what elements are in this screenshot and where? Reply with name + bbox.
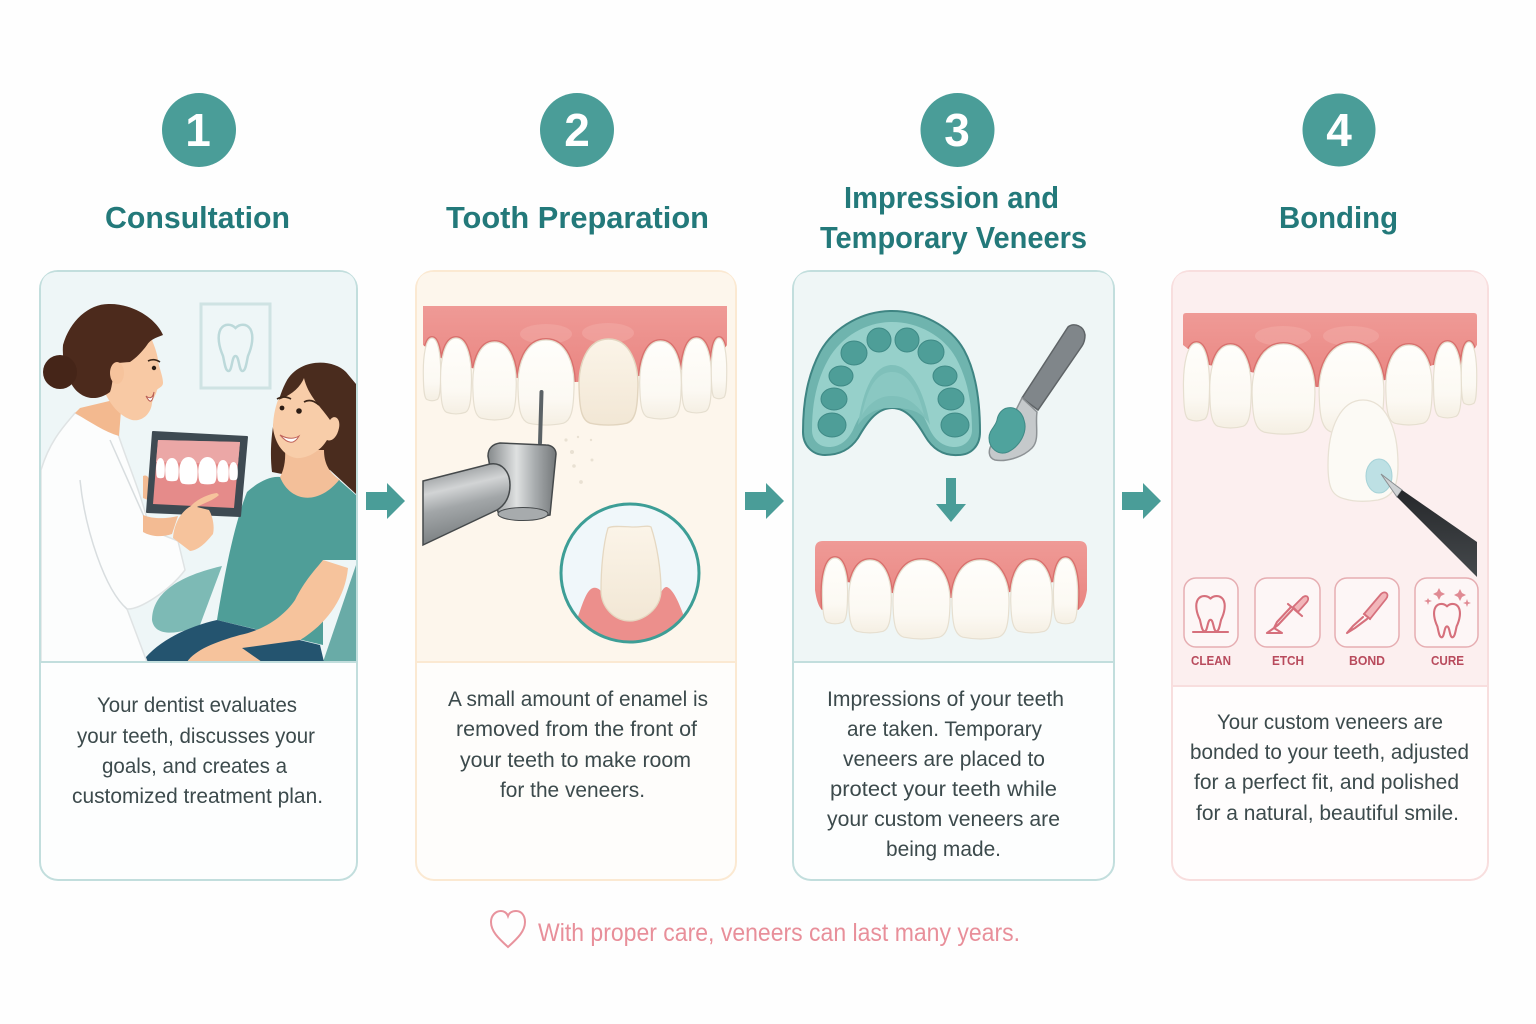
description text xyxy=(1190,711,1469,825)
arrow 2 to 3 xyxy=(745,483,784,519)
description text xyxy=(448,688,708,802)
tinted image area xyxy=(417,272,735,662)
step 3 number badge xyxy=(920,93,994,167)
plant in pot xyxy=(42,552,84,646)
panel divider xyxy=(794,661,1113,663)
description text: Your dentist evaluates xyxy=(97,694,297,717)
description text: customized treatment plan. xyxy=(72,785,323,808)
drill bur xyxy=(540,392,542,443)
down arrow xyxy=(936,478,966,522)
arrow 1 to 2 xyxy=(366,483,405,519)
step labels xyxy=(1191,654,1464,668)
icon: cure xyxy=(1415,578,1478,647)
step labels: ETCH xyxy=(1272,654,1304,668)
description text: veneers are placed to xyxy=(843,748,1045,771)
panel divider xyxy=(41,661,356,663)
step 2 number badge xyxy=(540,93,614,167)
description text: bonded to your teeth, adjusted xyxy=(1190,741,1469,764)
description text: Your custom veneers are xyxy=(1217,711,1443,734)
heading: Consultation: Consultation xyxy=(105,200,290,235)
consultation illustration xyxy=(41,272,356,662)
enamel dust xyxy=(564,436,594,484)
prepared tooth xyxy=(579,339,638,425)
panel: tooth preparation xyxy=(416,271,736,880)
panel: bonding xyxy=(1172,271,1488,880)
description text: for a perfect fit, and polished xyxy=(1194,771,1459,794)
wall picture of tooth xyxy=(201,304,270,388)
temporary veneers on gum model xyxy=(815,541,1087,639)
impression tray xyxy=(803,311,980,455)
description text: your custom veneers are xyxy=(827,808,1060,831)
description text: for the veneers. xyxy=(500,779,645,802)
description text: for a natural, beautiful smile. xyxy=(1196,802,1459,825)
dentist xyxy=(41,304,185,662)
card frame xyxy=(1172,271,1488,880)
description text: protect your teeth while xyxy=(830,778,1057,801)
step 4 number badge xyxy=(1302,94,1376,166)
step labels: CURE xyxy=(1431,654,1464,668)
panel divider xyxy=(1173,685,1487,687)
description text: being made. xyxy=(886,838,1001,861)
heading: Impression and Temporary Veneers: Temporary Veneers xyxy=(820,220,1087,255)
step 1 number badge xyxy=(162,93,236,167)
heading: Impression and Temporary Veneers: Impression and xyxy=(844,180,1059,215)
step 3 number badge: 3 xyxy=(944,104,970,156)
pointing hand xyxy=(173,493,219,551)
heading: Impression and Temporary Veneers xyxy=(820,180,1087,255)
card frame xyxy=(416,271,736,880)
dental drill handpiece xyxy=(423,392,556,545)
card frame xyxy=(793,271,1114,880)
patient xyxy=(142,363,356,662)
bonding dot xyxy=(1366,459,1392,493)
veneer shell xyxy=(1328,400,1398,501)
panel: consultation xyxy=(40,271,357,880)
step labels: BOND xyxy=(1349,654,1385,668)
dental chair xyxy=(152,565,356,662)
inset: prepared tooth close-up xyxy=(561,504,699,650)
icon: clean xyxy=(1184,578,1238,647)
gums and upper teeth xyxy=(423,306,727,425)
tablet showing teeth xyxy=(143,432,247,551)
icon: bond xyxy=(1335,578,1399,647)
description text: removed from the front of xyxy=(456,718,697,741)
heading: Tooth Preparation: Tooth Preparation xyxy=(446,200,709,235)
tinted image area xyxy=(1173,272,1487,686)
tinted image area xyxy=(794,272,1113,662)
drill head xyxy=(488,443,556,520)
step 2 number badge: 2 xyxy=(564,104,590,156)
bonding tool xyxy=(1381,474,1477,577)
step 1 number badge: 1 xyxy=(185,104,211,156)
side table xyxy=(41,628,128,662)
heading: Bonding: Bonding xyxy=(1279,200,1398,235)
description text xyxy=(72,694,323,808)
description text: goals, and creates a xyxy=(102,755,287,778)
arrow 3 to 4 xyxy=(1122,483,1161,519)
icon: heart xyxy=(491,911,525,947)
description text: A small amount of enamel is xyxy=(448,688,708,711)
description text: are taken. Temporary xyxy=(847,718,1042,741)
description text: your teeth to make room xyxy=(460,749,691,772)
description text xyxy=(827,688,1064,861)
card frame xyxy=(40,271,357,880)
footer note: With proper care, veneers can last many years. xyxy=(538,919,1020,947)
description text: your teeth, discusses your xyxy=(77,725,315,748)
drill handle xyxy=(423,464,510,545)
step labels: CLEAN xyxy=(1191,654,1231,668)
description text: Impressions of your teeth xyxy=(827,688,1064,711)
gums and veneered teeth xyxy=(1183,313,1477,434)
spatula with impression material xyxy=(989,325,1085,460)
panel: impression and temporary veneers xyxy=(793,271,1114,880)
icon: etch xyxy=(1255,578,1320,647)
step 4 number badge: 4 xyxy=(1326,104,1352,156)
panel divider xyxy=(417,661,735,663)
